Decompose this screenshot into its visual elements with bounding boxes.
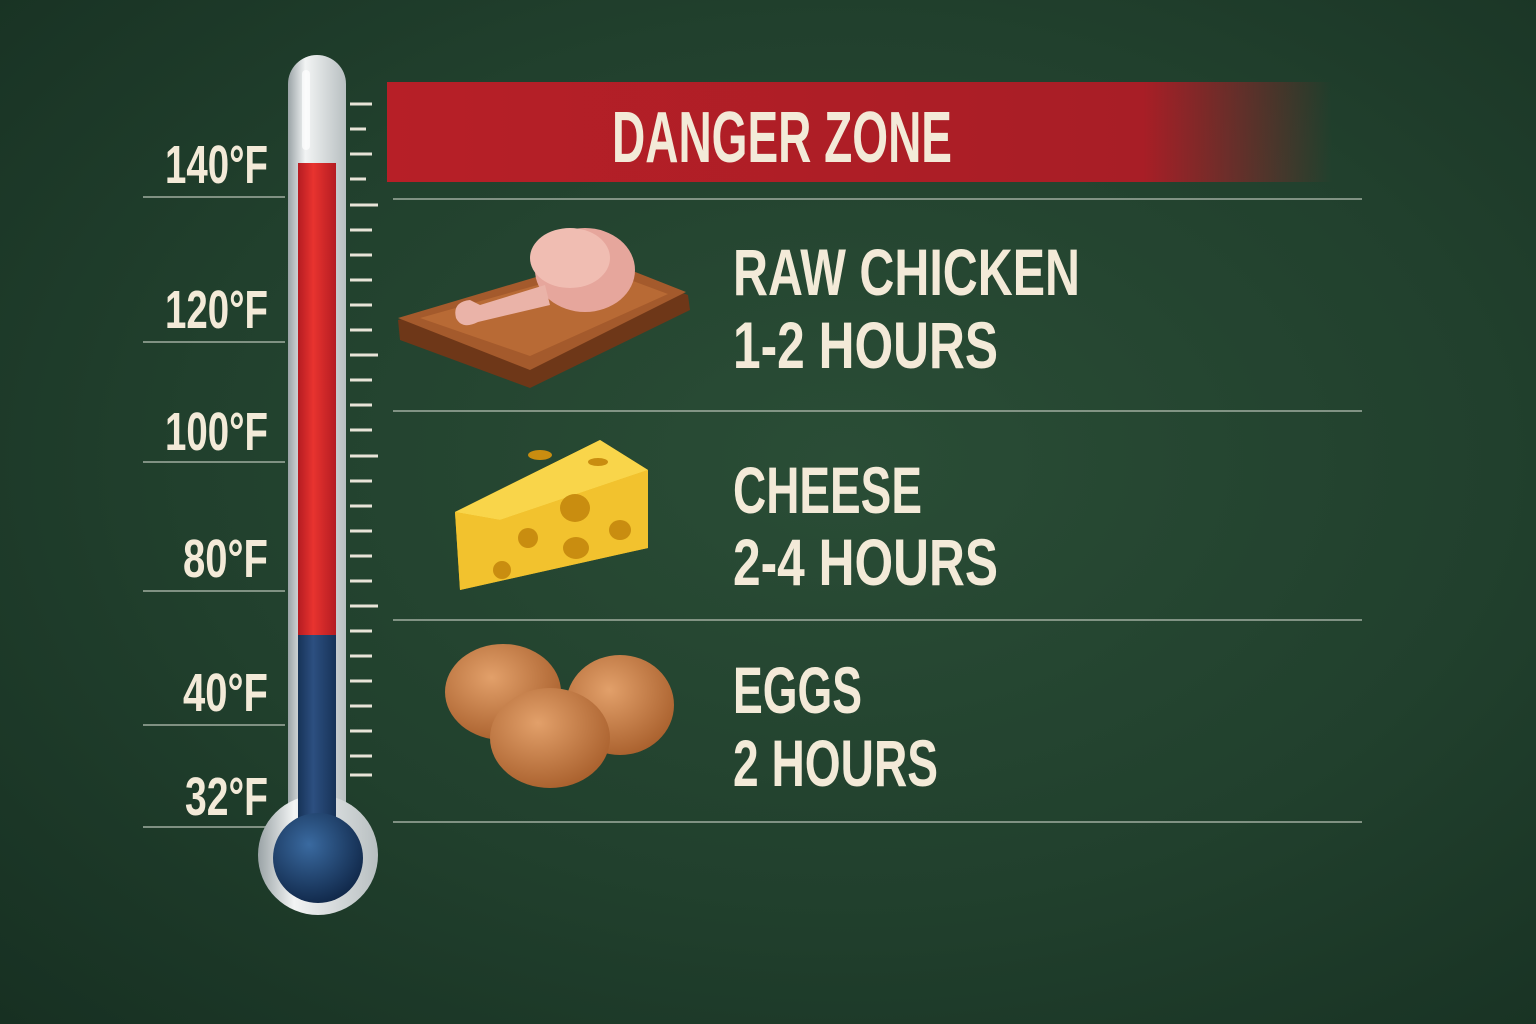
food labels: 2 HOURS: [733, 726, 938, 800]
danger zone banner: [387, 82, 1332, 182]
thermometer: [258, 55, 378, 915]
temperature labels: [165, 135, 268, 827]
danger zone banner: DANGER ZONE: [612, 98, 952, 178]
food labels: 2-4 HOURS: [733, 525, 998, 599]
icon: eggs: [445, 644, 674, 788]
temperature labels: 80°F: [183, 529, 268, 589]
temperature labels: 40°F: [183, 663, 268, 723]
food labels: CHEESE: [733, 453, 922, 527]
temperature labels: 120°F: [165, 280, 268, 340]
icon: cheese: [455, 440, 648, 590]
food labels: [733, 235, 1080, 800]
tick marks: [350, 104, 378, 775]
temperature labels: 32°F: [185, 767, 268, 827]
temperature labels: 100°F: [165, 402, 268, 462]
food labels: 1-2 HOURS: [733, 308, 998, 382]
food labels: RAW CHICKEN: [733, 235, 1080, 309]
icon: raw chicken on board: [398, 228, 690, 388]
temperature labels: 140°F: [165, 135, 268, 195]
divider lines: [143, 197, 1362, 827]
food labels: EGGS: [733, 653, 862, 727]
